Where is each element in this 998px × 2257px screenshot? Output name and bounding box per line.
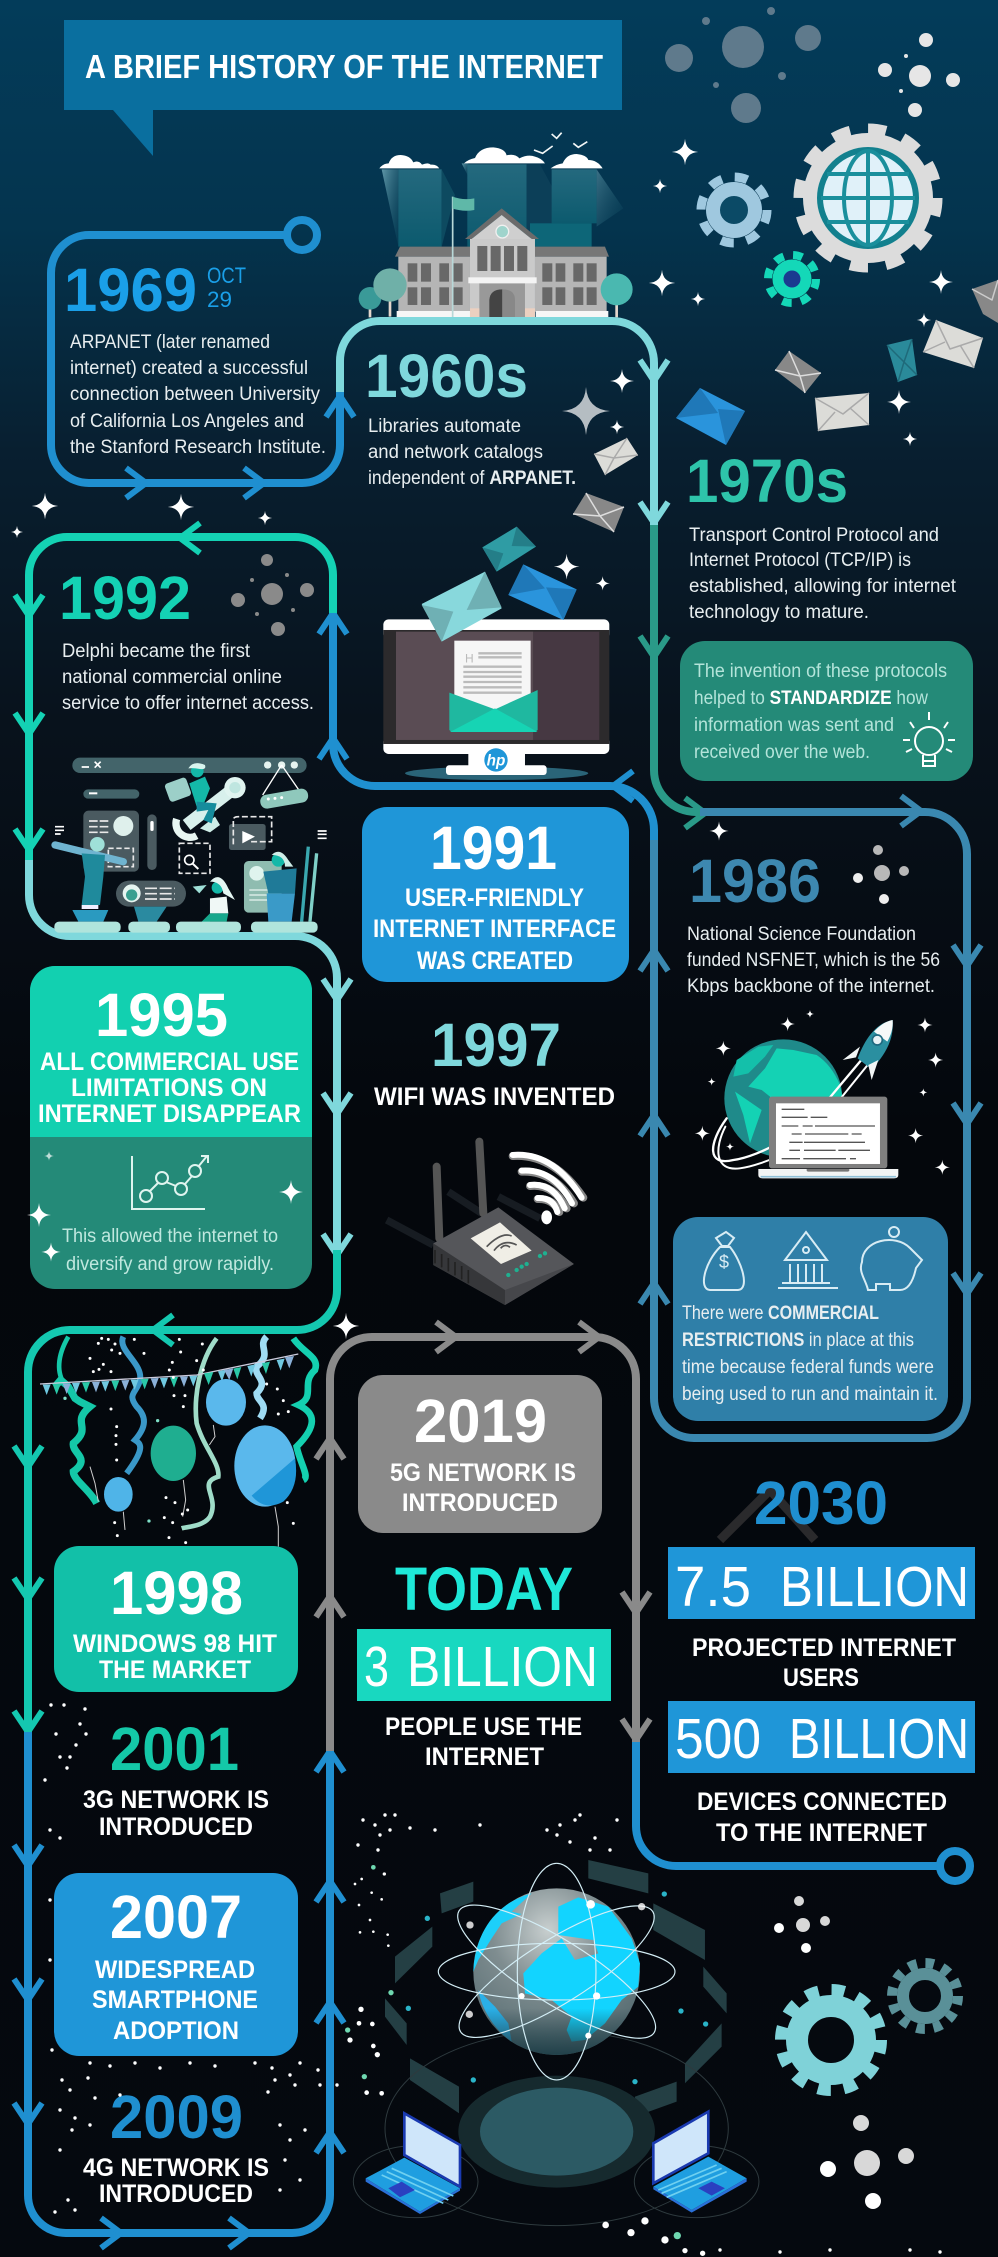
- path: 1991: [319, 613, 654, 840]
- text block: today: BILLION: [407, 1635, 598, 1699]
- text block: 1997: [374, 1011, 615, 1111]
- text block: 1992: service to offer internet access.: [62, 693, 314, 714]
- text block: 2001: 2001: [110, 1715, 239, 1783]
- text block: 1969: of California Los Angeles and: [70, 411, 304, 432]
- text block: 1997: WIFI WAS INVENTED: [374, 1083, 615, 1111]
- icon: small gears: [701, 177, 816, 303]
- decorative bubbles top right: [665, 7, 960, 123]
- panel: 1995: 1995: [95, 981, 228, 1049]
- text block: 1986: funded NSFNET, which is the 56: [687, 950, 940, 971]
- panel: 2019: 2019: [414, 1387, 547, 1455]
- text block: 2030: 7.5: [675, 1555, 751, 1619]
- panel: 1991: WAS CREATED: [417, 947, 573, 975]
- text block: 1969: 1969: [64, 256, 197, 324]
- text block: 1992: 1992: [59, 564, 191, 632]
- icon: left laptop: [366, 2113, 460, 2214]
- illustration: earth with orbits and laptops: [345, 1860, 759, 2256]
- panel: 1991: 1991: [430, 814, 557, 882]
- illustration: balloons and streamers: [40, 1337, 316, 1547]
- icon: dots bottom: [774, 1896, 914, 2209]
- panel: protocols callout: information was sent and: [694, 715, 894, 736]
- text block: 1986: Kbps backbone of the internet.: [687, 976, 935, 997]
- text block: 1969: [64, 256, 326, 458]
- panel: 1995: [27, 966, 312, 1289]
- text block: 1986: National Science Foundation: [687, 924, 916, 945]
- panel: commercial restrictions: $: [719, 1252, 729, 1272]
- text block: 1960s: Libraries automate: [368, 416, 521, 437]
- illustration: monitor with envelope: [383, 527, 610, 780]
- panel: protocols callout: helped to STANDARDIZE how: [694, 688, 928, 709]
- panel: 2007: 2007: [110, 1883, 242, 1951]
- illustration: earth laptop and rocket: [695, 1010, 950, 1178]
- illustration: library building: [359, 133, 633, 318]
- text block: 1970s: technology to mature.: [689, 602, 869, 623]
- panel: 2007: [54, 1873, 298, 2056]
- panel: 2019: 5G NETWORK IS: [390, 1459, 576, 1487]
- panel: 1998: [54, 1546, 298, 1692]
- icon: light bulb: [903, 712, 955, 766]
- panel: 1991: [362, 807, 629, 982]
- path: 1992: [15, 523, 333, 860]
- star dots: [45, 1705, 940, 2252]
- panel: 1995: This allowed the internet to: [62, 1226, 278, 1247]
- text block: 1969: ARPANET (later renamed: [70, 332, 270, 353]
- panel: commercial restrictions: time because federal funds were: [682, 1357, 934, 1378]
- icon: gears bottom: [781, 1963, 958, 2090]
- text block: 1970s: Internet Protocol (TCP/IP) is: [689, 550, 911, 571]
- panel: 1998: THE MARKET: [99, 1656, 251, 1684]
- envelope light teal: [422, 572, 502, 642]
- panel: protocols callout: [680, 641, 973, 781]
- path: 2030 end: [636, 1742, 970, 1881]
- text block: 2030: 500: [675, 1707, 761, 1771]
- panel: 1998: 1998: [110, 1559, 243, 1627]
- panel: 1998: WINDOWS 98 HIT: [73, 1630, 277, 1658]
- panel: 1991: INTERNET INTERFACE: [373, 915, 616, 943]
- text block: 2001: [83, 1715, 269, 1841]
- text block: 1997: 1997: [431, 1011, 561, 1079]
- text block: 1970s: 1970s: [686, 447, 848, 515]
- envelope blue: [508, 564, 577, 620]
- envelope teal: [482, 527, 536, 572]
- text block: 1969: connection between University: [70, 384, 320, 405]
- text block: 2009: [83, 2083, 269, 2208]
- panel: 2007: SMARTPHONE: [92, 1986, 258, 2014]
- panel: commercial restrictions: [673, 1217, 948, 1421]
- illustration: monitor with envelope: H: [465, 651, 474, 665]
- panel: 1995: INTERNET DISAPPEAR: [38, 1100, 301, 1128]
- text block: today: PEOPLE USE THE: [385, 1713, 582, 1741]
- text block: 1969: internet) created a successful: [70, 358, 308, 379]
- title banner: A BRIEF HISTORY OF THE INTERNET: [85, 48, 603, 85]
- panel: protocols callout: The invention of these protocols: [694, 661, 947, 682]
- text block: 1970s: [686, 447, 957, 623]
- text block: today: 3: [364, 1635, 389, 1699]
- text block: 2001: 3G NETWORK IS: [83, 1786, 269, 1814]
- text block: 1986: 1986: [689, 847, 821, 915]
- illustration: wifi router: [387, 1142, 583, 1305]
- text block: 1986: [687, 847, 940, 997]
- panel: 2007: ADOPTION: [113, 2017, 239, 2045]
- path: 1986: [640, 796, 981, 1438]
- panel: 1991: USER-FRIENDLY: [405, 884, 584, 912]
- text block: 1960s: and network catalogs: [368, 442, 543, 463]
- icon: right laptop: [653, 2112, 747, 2213]
- panel: 2019: INTRODUCED: [402, 1489, 558, 1517]
- panel: commercial restrictions: being used to run and maintain it.: [682, 1384, 938, 1405]
- text block: 1992: [59, 564, 314, 714]
- icon: money bag, bank, piggy bank: [704, 1227, 922, 1290]
- panel: 1995: LIMITATIONS ON: [71, 1074, 267, 1102]
- path: 2001-2009: [14, 1732, 344, 2248]
- text block: 1960s: independent of ARPANET.: [368, 468, 576, 489]
- text block: 2009: 4G NETWORK IS: [83, 2154, 269, 2182]
- text block: 1992: Delphi became the first: [62, 641, 251, 662]
- text block: today: TODAY: [395, 1555, 573, 1623]
- text block: 2030: USERS: [783, 1664, 859, 1692]
- text block: today: INTERNET: [425, 1743, 544, 1771]
- text block: today: [357, 1555, 611, 1771]
- panel: protocols callout: received over the web.: [694, 742, 870, 763]
- text block: 2001: INTRODUCED: [99, 1813, 253, 1841]
- text block: 2030: 2030: [754, 1469, 888, 1537]
- text block: 1960s: 1960s: [365, 342, 528, 410]
- icon: dots 1986: [853, 845, 909, 904]
- title banner: [64, 20, 622, 156]
- text block: 2009: 2009: [110, 2083, 243, 2151]
- text block: 1992: national commercial online: [62, 667, 282, 688]
- text block: 2009: INTRODUCED: [99, 2180, 253, 2208]
- panel: 1995: diversify and grow rapidly.: [66, 1254, 274, 1275]
- illustration: people building interface: [54, 758, 327, 933]
- text block: 1970s: established, allowing for internet: [689, 576, 957, 597]
- icon: gear with globe: [800, 130, 936, 266]
- path: 1969: [51, 220, 354, 498]
- text block: 1960s: [365, 342, 576, 489]
- text block: 2030: [668, 1469, 975, 1847]
- text block: 1970s: Transport Control Protocol and: [689, 525, 939, 546]
- sparkles: [11, 139, 953, 1339]
- illustration: monitor with envelope: hp: [487, 753, 505, 770]
- icon: grey dots 1992: [231, 554, 314, 636]
- panel: commercial restrictions: There were COMMERCIAL: [682, 1303, 879, 1324]
- path: 1960s: [340, 321, 668, 525]
- text block: 1969: the Stanford Research Institute.: [70, 437, 326, 458]
- panel: 1995: ALL COMMERCIAL USE: [40, 1048, 299, 1076]
- text block: 1969: 29: [207, 287, 232, 312]
- text block: 2030: BILLION: [780, 1555, 969, 1619]
- text block: 2030: DEVICES CONNECTED: [697, 1788, 947, 1816]
- icon: growth chart: [132, 1156, 208, 1209]
- text block: 2030: PROJECTED INTERNET: [692, 1634, 956, 1662]
- path: 1995: [29, 860, 351, 1255]
- path: 2019 and today: [316, 1322, 650, 1751]
- text block: 2030: TO THE INTERNET: [716, 1819, 927, 1847]
- panel: 2007: WIDESPREAD: [95, 1956, 255, 1984]
- panel: 2019: [358, 1375, 602, 1533]
- illustration: flying envelopes: [573, 280, 998, 532]
- path: 1970s: [640, 525, 705, 828]
- path: 1998: [14, 1250, 337, 1732]
- text block: 1969: OCT: [207, 263, 246, 288]
- panel: commercial restrictions: RESTRICTIONS in place at this: [682, 1330, 914, 1351]
